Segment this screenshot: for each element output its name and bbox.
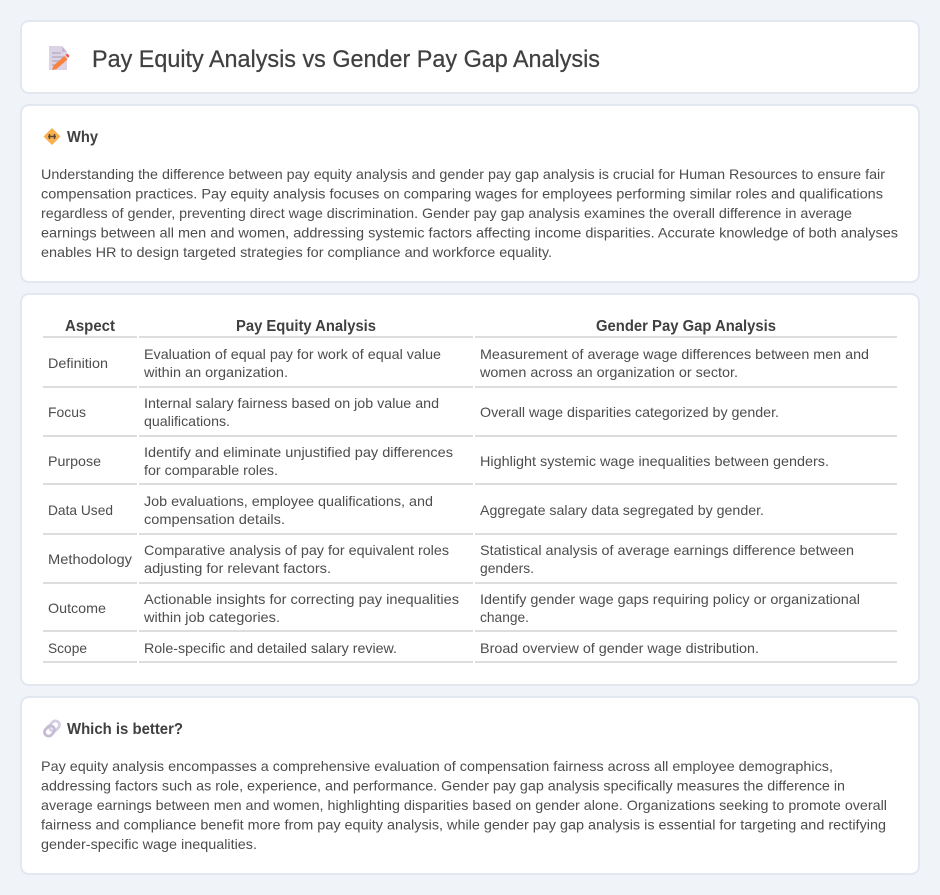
title: Pay Equity Analysis vs Gender Pay Gap Analysis bbox=[92, 46, 600, 73]
row: purpose: Purpose bbox=[48, 453, 101, 469]
row: methodology: Methodology bbox=[48, 551, 132, 567]
row: scope: Role-specific and detailed salary review. bbox=[144, 640, 397, 656]
why text block: Understanding the difference between pay equity analysis and gender pay gap analysis is crucial for Human Resources to ensure fair bbox=[41, 166, 885, 182]
which is better text block: Pay equity analysis encompasses a comprehensive evaluation of compensation fairness across all employee demographics, bbox=[41, 758, 833, 774]
why text block: enables HR to design targeted strategies for compliance and workforce equality. bbox=[41, 244, 552, 260]
row: definition: Evaluation of equal pay for work of equal value bbox=[144, 346, 441, 362]
which is better text block bbox=[41, 758, 887, 852]
panel: comparison table bbox=[21, 294, 919, 685]
row: definition: women across an organization or sector. bbox=[479, 364, 738, 380]
panel: title header bbox=[21, 21, 919, 93]
row: purpose: Highlight systemic wage inequalities between genders. bbox=[480, 453, 829, 469]
row: outcome bbox=[43, 591, 897, 632]
row: outcome: within job categories. bbox=[143, 609, 280, 625]
table header: Pay Equity Analysis bbox=[236, 318, 376, 335]
table header bbox=[43, 318, 897, 338]
row: data used: compensation details. bbox=[144, 511, 285, 527]
row: outcome: Outcome bbox=[48, 600, 106, 616]
row: definition bbox=[43, 346, 897, 388]
which is better text block: gender-specific wage inequalities. bbox=[41, 836, 257, 852]
row: methodology: genders. bbox=[480, 560, 534, 576]
row: scope: Scope bbox=[48, 640, 87, 656]
row: purpose: for comparable roles. bbox=[144, 462, 278, 478]
row: outcome: change. bbox=[480, 609, 529, 625]
why text block: earnings between all men and women, addressing systemic factors affecting income disparities. Accurate knowledge of both analyses bbox=[41, 224, 898, 240]
panel: why bbox=[21, 105, 919, 282]
row: methodology: adjusting for relevant factors. bbox=[144, 560, 331, 576]
row: data used: Data Used bbox=[48, 502, 113, 518]
row: definition: Definition bbox=[48, 355, 108, 371]
row: methodology: Comparative analysis of pay for equivalent roles bbox=[144, 542, 449, 558]
row: focus: Internal salary fairness based on job value and bbox=[144, 395, 439, 411]
row: focus: Overall wage disparities categorized by gender. bbox=[480, 404, 779, 420]
why text block bbox=[41, 166, 898, 260]
row: definition: Measurement of average wage differences between men and bbox=[480, 346, 869, 362]
row: methodology bbox=[43, 542, 897, 584]
why text block: compensation practices. Pay equity analysis focuses on comparing wages for employees performing similar roles and qualifications bbox=[41, 186, 883, 202]
why text block: regardless of gender, preventing direct wage discrimination. Gender pay gap analysis examines the overall difference in average bbox=[41, 205, 852, 221]
row: definition: within an organization. bbox=[143, 364, 288, 380]
row: scope bbox=[43, 640, 897, 663]
which is better text block: fairness and compliance benefit more from pay equity analysis, while gender pay gap analysis is essential for targeting and rectifying bbox=[41, 816, 886, 832]
icon: orange diamond sign bbox=[44, 129, 60, 144]
icon: chain link bbox=[43, 719, 61, 738]
heading: why: Why bbox=[67, 129, 98, 146]
row: purpose: Identify and eliminate unjustified pay differences bbox=[144, 444, 453, 460]
table header: Gender Pay Gap Analysis bbox=[596, 318, 776, 335]
row: outcome: Identify gender wage gaps requiring policy or organizational bbox=[480, 591, 860, 607]
row: data used: Aggregate salary data segregated by gender. bbox=[480, 502, 764, 518]
icon: document with pencil bbox=[49, 46, 70, 70]
row: focus: qualifications. bbox=[144, 413, 230, 429]
which is better text block: addressing factors such as role, experience, and performance. Gender pay gap analysis specifically measures the difference in bbox=[41, 778, 845, 794]
row: data used: Job evaluations, employee qualifications, and bbox=[144, 493, 433, 509]
panel: which is better bbox=[21, 697, 919, 874]
row: methodology: Statistical analysis of average earnings difference between bbox=[480, 542, 854, 558]
row: data used bbox=[43, 493, 897, 535]
row: focus bbox=[43, 395, 897, 437]
which is better text block: average earnings between men and women, highlighting disparities based on gender alone. Organizations seeking to promote overall bbox=[41, 797, 887, 813]
table header: Aspect bbox=[65, 318, 116, 335]
heading: which is better: Which is better? bbox=[67, 721, 183, 738]
row: purpose bbox=[43, 444, 897, 485]
row: scope: Broad overview of gender wage distribution. bbox=[480, 640, 759, 656]
row: outcome: Actionable insights for correcting pay inequalities bbox=[144, 591, 459, 607]
row: focus: Focus bbox=[48, 404, 86, 420]
